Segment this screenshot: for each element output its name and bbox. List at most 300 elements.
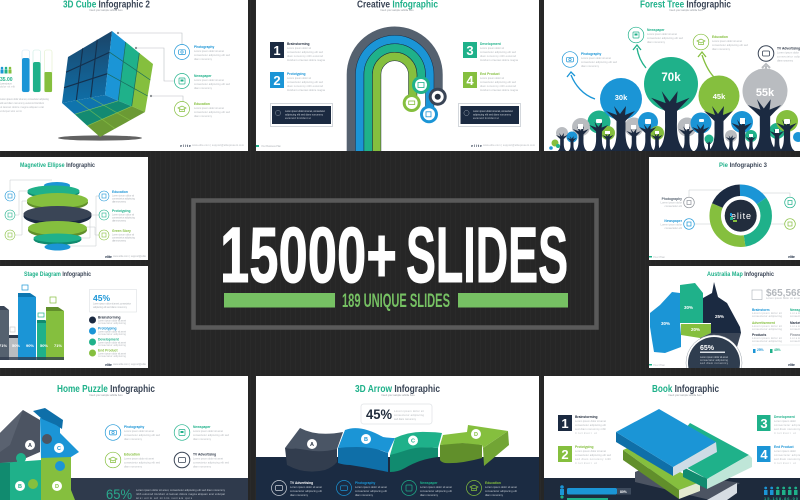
text: newspaper: diam nonummy [647,40,666,44]
item: newspaper: consectetur adipiscing elit sed [193,433,230,437]
step 3: tincidunt ut [774,431,796,435]
puzzle letters: D [55,484,59,490]
item: photography: consectetur adipiscing elit [355,489,387,493]
arrow segment C: C [411,438,415,444]
text left: Newspaper [664,219,683,223]
list: stages: Lorem ipsum dolor sit amet [98,340,126,344]
stat box: 45%: 45% [366,406,393,422]
list: stages: Lorem ipsum dolor sit amet [98,352,126,356]
panel: book infographic [544,376,800,500]
step 1: consectetur adipiscing elit [575,423,606,427]
text: newspaper: Lorem ipsum dolor sit amet [194,78,224,82]
item: photography: consectetur adipiscing elit sed [124,433,161,437]
item: education: diam nonummy [485,493,504,497]
title: Book Infographic [652,384,719,395]
step 3: Development [480,42,502,46]
text: photography: Lorem ipsum dolor sit amet [581,56,611,60]
title: Stage Diagram Infographic [24,271,91,278]
text: tv advertising: TV Advertising [777,46,800,50]
book: blue [616,409,717,476]
item: photography: Lorem ipsum dolor sit amet [355,485,387,489]
subtitle: Insert your sample subtitle here [89,394,123,397]
map circle: 65% stat: sed diam nonummy [700,361,729,365]
item: photography: Lorem ipsum dolor sit amet [124,429,154,433]
donut center: elite logo: elite [731,211,751,221]
title: Magnetive Ellipse Infographic [20,162,95,169]
stat box: 45%: sed diam nonummy [394,417,417,421]
step 4: Lorem ipsum dolor [774,449,796,453]
text right: consectetur adipiscing [112,196,136,200]
text right: Prototyping [112,209,130,213]
puzzle letters: C [57,446,61,452]
icons right [99,191,109,240]
step 3: consectetur adipis [774,423,800,427]
band text [136,489,225,500]
chart: donut [715,190,766,241]
dark band [70,478,248,500]
small bubble icons [578,118,790,137]
footer: elite [788,362,796,367]
arrow segment D: D [474,432,478,438]
bubble: 30k [600,78,642,120]
stat box: 45%: Lorem ipsum dolor sit amet, consectetur [93,302,131,306]
text: stats grid: Lorem ipsum dolor sit [752,336,782,340]
statistic: people and value: volutpat wisi enim [0,109,22,113]
text: stats grid: Lorem [790,311,800,315]
bubble: 30k: 30k [615,93,628,102]
map: regions: 30% [684,305,693,310]
text: photography: consectetur adipiscing elit sed [194,53,231,57]
panel: stage diagram infographic [0,266,148,368]
icons left [5,191,15,240]
step 2 [270,72,326,92]
statistic: people and value: Lorem ipsum dolor sit amet, consectetur adipiscing [0,97,50,101]
item: education: Education [485,481,501,485]
item: education: Lorem ipsum dolor sit amet [124,456,154,460]
list: stages [89,316,127,358]
callout right: euismod tincidunt ut [473,116,499,120]
step 1: Brainstorming [575,415,598,419]
bubble: 55k [742,68,788,114]
subtitle: Insert your sample subtitle here [380,9,414,12]
step 3: 3 [760,416,768,431]
text left [661,197,683,230]
connector lines [117,32,183,102]
item: photography [105,425,161,441]
text: stats grid: Brainstorm [752,308,770,312]
text: education: consectetur adipiscing elit sed [712,43,749,47]
text right: diam nonummy [112,238,127,242]
step 2: 2 [561,447,569,462]
step 2: Prototyping [575,445,594,449]
text right: Education [112,190,128,194]
footer [105,254,147,259]
title: Home Puzzle Infographic [57,384,155,395]
text left: Photography [662,197,682,201]
footer [649,364,795,366]
panel: magnetive ellipse infographic [0,157,148,260]
footer: www.elite.com | support@elitepresent.com [483,143,535,147]
step 3: 3 [466,43,474,58]
text: tv advertising: diam nonummy [777,58,794,62]
text: stats grid [752,308,800,353]
footer: elite [105,362,113,367]
text: education: diam nonummy [194,114,213,118]
graphic: 3D cube [62,31,153,137]
subheading: 189 unique slides: 189 UNIQUE SLIDES [342,290,450,312]
item: newspaper [402,480,452,497]
map: regions: 25% [715,314,724,319]
text: photography: Photography [581,52,601,56]
bubble: 45k: 45k [713,92,726,101]
step 2: tincidunt ut [575,461,597,465]
text: newspaper: Newspaper [194,74,212,78]
callout left: Lorem ipsum dolor sit amet, consectetur [285,109,325,113]
graphic: rainbow arch [351,31,438,151]
text: newspaper: Lorem ipsum dolor sit amet [647,32,677,36]
list: stages: End Product [98,348,118,352]
step 1: 1 [561,416,569,431]
step 1: 1 [273,43,281,58]
icon: dark head [429,88,447,106]
step 4: Lorem ipsum dolor sit [480,76,504,80]
item: education: Lorem ipsum dolor sit amet [485,485,517,489]
step 4: End Product [480,72,500,76]
text right: Green Story [112,229,131,233]
book: gray [635,468,740,500]
item: tv advertising [174,452,230,468]
text: stats grid: consect [790,314,800,318]
stat box: 45%: Lorem ipsum dolor sit [394,409,424,413]
connector lines [689,190,790,224]
list: stages: Brainstorming [98,316,121,320]
text: photography: Photography [194,45,214,49]
text: stats grid: consectetur adipiscing [752,339,783,343]
headline: 15000+ SLIDES: 15000+ [220,210,397,299]
text: education: Lorem ipsum dolor sit amet [194,106,224,110]
statistic: people and value: 35.00 [0,77,13,83]
text: newspaper [194,74,231,90]
title: Australia Map Infographic [707,271,774,278]
map: regions: 30% [661,321,670,326]
callout right: adipiscing elit sed diam nonummy [473,112,512,116]
step 3: consectetur adipiscing elit sed [480,50,517,54]
text: education: Education [194,102,210,106]
step 1: sed diam nonummy nibh [575,427,607,431]
step 2: tincidunt ut laoreet dolore magna [287,88,326,92]
text: photography: Lorem ipsum dolor sit amet [194,49,224,53]
icon: blue pencil [420,105,438,123]
text right: Lorem ipsum dolor sit [112,232,134,236]
list: stages: Prototyping [98,326,116,330]
map circle: 65% stat [686,334,742,368]
footer [105,362,147,367]
arrow segment D [440,425,509,466]
text: stats grid: Lorem ipsum dolor sit [752,311,782,315]
callout left: euismod tincidunt ut [285,116,311,120]
text: photography [194,45,231,61]
step 3: Development [774,415,796,419]
item: photography [336,480,387,497]
footer [256,143,535,148]
bubble: 70k [644,57,698,111]
step 4 [463,72,519,92]
subtitle: Insert your sample subtitle here [89,9,123,12]
center banner [194,200,596,328]
item: tv advertising: TV Advertising [290,481,313,485]
text: tv advertising [777,46,800,62]
statistic: people and value [0,67,50,113]
item: tv advertising: Lorem ipsum dolor sit amet [290,485,322,489]
map circle: 65% stat: Lorem ipsum dolor sit amet [700,355,728,359]
text: newspaper [647,28,684,44]
bubble: 45k [698,76,740,116]
title: Pie Infographic 3 [719,162,767,169]
step 4: End Product [774,445,794,449]
stat box: 45%: consectetur adipiscing [394,413,425,417]
step 4: consectetur adipis [774,453,800,457]
item: education [105,452,161,468]
icons over bars [10,285,56,332]
arrow segment A: A [310,442,314,448]
step 3: Lorem ipsum dolor sit [480,46,504,50]
icon: photography [562,52,578,67]
footer: elite [471,143,483,148]
text: stats grid: Advertisement [752,321,776,325]
text right: diam nonummy [112,218,127,222]
icon: green flag [403,94,421,112]
callout left: adipiscing elit sed diam nonummy [285,112,324,116]
callout right [458,104,520,126]
bubble: 55k: 55k [756,87,775,99]
text: education: diam nonummy [712,47,731,51]
text right: Lorem ipsum dolor sit [112,194,134,198]
donut center: elite logo [721,196,760,235]
band text: nibh euismod tincidunt ut laoreet dolore magna aliquam erat volutpat [136,492,225,496]
puzzle letters: B [18,484,22,490]
book: green [623,447,700,499]
panel: home puzzle infographic [0,376,248,500]
footer: Your Plan [653,255,666,259]
step 2 [558,445,612,465]
step 2: sed diam nonummy nibh [575,457,612,461]
bubble: 70k: 70k [661,72,681,84]
panel: forest tree infographic [544,0,800,151]
item: newspaper [174,425,230,441]
step 1 [270,42,326,62]
step 4: diam nonummy nibh euismod [480,84,517,88]
item: photography: diam nonummy [124,437,143,441]
step 1: Brainstorming [287,42,310,46]
shadow under cube [58,135,142,141]
text: photography [581,52,618,68]
step 1: Lorem ipsum dolor sit [287,46,311,50]
icon: newspaper [174,74,190,88]
list: stages: consectetur adipiscing [98,343,127,347]
bar: second [560,495,608,500]
statistic: people and value: Lorem ipsum [0,82,12,86]
arrow segment B: B [364,437,368,443]
stat box: 45%: adipiscing elit sed diam nonummy [93,305,128,309]
item: photography: Photography [124,425,144,429]
text: education: Education [712,35,728,39]
item: photography: Photography [355,481,375,485]
icon: education [693,34,709,50]
value: $65,568,56.0: Lorem ipsum dolor sit amet [766,296,800,300]
step 2: consectetur adipiscing elit sed [287,80,324,84]
item: tv advertising [272,480,322,497]
item: education [466,480,517,497]
chart: 3D stage bars [0,293,64,360]
step 3: sed diam nonummy [774,427,800,431]
footer: elite contact: elite [180,143,192,148]
footer: www.elite.com | support@elite [113,362,147,366]
list: stages: Lorem ipsum dolor sit amet [98,330,126,334]
text: education [194,102,231,118]
text: stats grid: Lorem ipsum dolor sit [752,324,782,328]
footer: www.elite.com | support@elite [113,254,147,258]
item: newspaper: Lorem ipsum dolor sit amet [420,485,452,489]
list: stages: Development [98,338,120,342]
callout left [270,104,332,126]
puzzle letters [15,440,64,491]
text: photography: diam nonummy [581,64,600,68]
chart: 3D stage bars: 50% [12,343,20,348]
graphic: stacked ellipses [24,182,92,250]
item: newspaper: diam nonummy [420,493,439,497]
statistic: people and value: dolor sit elit [0,84,15,88]
dark band [544,478,800,500]
map circle: 65% stat: consectetur adipiscing [700,358,729,362]
headline: 15000+ SLIDES: SLIDES [406,210,568,299]
item: tv advertising: consectetur adipiscing elit sed [193,460,230,464]
subtitle: Insert your sample subtitle here [668,394,702,397]
arrow segment B [338,428,395,472]
band text: wisi enim ad minim veniam quis [136,496,193,500]
footer: elite contact [180,143,244,148]
chart: percentage bars [22,50,52,92]
text right [112,190,136,242]
text: photography: diam nonummy [194,57,213,61]
text: stats grid: Lorem [790,324,800,328]
panel: 3D cube infographic [0,0,248,151]
map: regions [650,282,741,353]
value: $65,568,56.0 [752,288,800,300]
statistic: people and value: elit sed diam nonummy euismod tincidunt [0,101,44,105]
text: stats grid: Lorem [790,336,800,340]
icon: teal calendar [412,76,430,94]
footer [649,254,796,259]
item: tv advertising: Lorem ipsum dolor sit amet [193,456,223,460]
item: tv advertising: TV Advertising [193,452,216,456]
step 1: Lorem ipsum dolor sit amet [575,419,606,423]
text: stats grid: Products [752,333,766,337]
text left: consectetur elit [665,204,682,208]
item: education: consectetur adipiscing elit [485,489,517,493]
list: stages: consectetur adipiscing [98,332,127,336]
chart: 3D stage bars: 90% [26,343,34,348]
footer: Your Plan [653,363,666,367]
book: teal [664,423,752,489]
text: stats grid: consectetur adipiscing [752,327,783,331]
stat box: 45% [361,404,432,424]
item: newspaper: consectetur adipiscing elit [420,489,452,493]
item: education: Education [124,452,140,456]
item: tv advertising: diam nonummy [290,493,309,497]
arrow segment C [390,432,442,472]
text right: diam nonummy [112,200,127,204]
footer: elite [788,254,796,259]
item: newspaper: Newspaper [420,481,438,485]
text: stats grid: consectetur adipiscing [752,314,783,318]
text: education [712,35,749,51]
footer: elite [105,254,113,259]
step 1 [558,415,607,435]
bar: 80% [560,485,631,495]
step 3: diam nonummy nibh euismod [480,54,517,58]
map: regions: 20% [691,327,700,332]
panel: creative infographic [256,0,539,151]
arrows [567,45,770,99]
dark band [256,457,539,500]
footer: elite contact: www.elite.com | support@elitepresent.com [192,143,244,147]
list: stages: consectetur adipiscing [98,321,127,325]
step 4: sed diam nonummy [774,457,800,461]
text: newspaper: Newspaper [647,28,665,32]
small background bubbles [549,110,800,150]
icon: education [174,102,190,116]
subtitle: Insert your sample subtitle here [381,394,415,397]
map circle: 65% stat: 65% [700,345,715,352]
callout right: Lorem ipsum dolor sit amet, consectetur [473,109,513,113]
item: education: diam nonummy [124,464,143,468]
text: newspaper: diam nonummy [194,86,213,90]
step 3: Lorem ipsum dolor [774,419,796,423]
icon: tv advertising [758,46,774,61]
panel: australia map infographic [649,266,800,368]
item: newspaper: diam nonummy [193,437,212,441]
people icons row [764,487,798,495]
step 1: diam nonummy nibh euismod [287,54,324,58]
icon: photography [174,44,190,60]
text: newspaper: consectetur adipiscing elit sed [647,36,684,40]
panel: 3D arrow infographic [256,376,539,500]
icon: newspaper [628,27,644,43]
green bar right [458,293,568,308]
text left: consectetur elit [665,226,682,230]
text right: consectetur adipiscing [112,236,136,240]
title: 3D Arrow Infographic [355,384,440,395]
step 4: 4 [760,447,768,462]
text left: Lorem ipsum dolor [661,222,682,226]
text: tv advertising: Lorem ipsum dolor [777,50,799,54]
text left: Lorem ipsum dolor [661,200,682,204]
step 2: diam nonummy nibh euismod [287,84,324,88]
item: tv advertising: consectetur adipiscing elit [290,489,322,493]
subtitle: Insert your sample subtitle here [669,9,703,12]
arrow segment A [285,428,343,472]
step 4: tincidunt ut [774,461,796,465]
graphic: house puzzle [0,408,79,500]
chart: 3D stage bars: 50% [40,343,48,348]
list: stages: consectetur adipiscing [98,354,127,358]
step 1: tincidunt ut laoreet dolore magna [287,58,326,62]
frame [194,200,596,328]
statistic: people and value: ut laoreet dolore magna aliquam erat [0,105,44,109]
icons [684,197,795,229]
stat box: 45%: 45% [93,293,110,303]
step 2: Prototyping [287,72,306,76]
